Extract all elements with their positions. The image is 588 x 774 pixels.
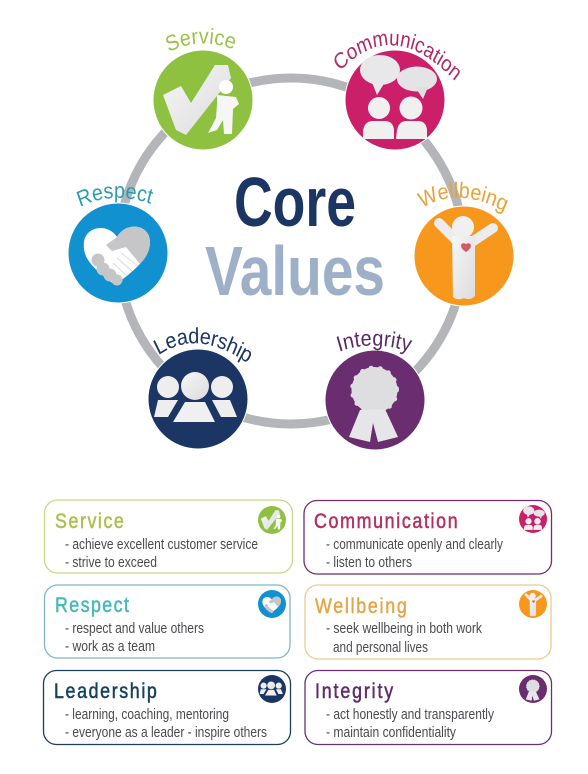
card: Wellbeing: - seek wellbeing in both work xyxy=(326,621,483,637)
badge: Integrity xyxy=(326,331,424,450)
badge: Service: Service xyxy=(166,28,235,50)
badge: Leadership xyxy=(148,327,252,448)
card: Wellbeing xyxy=(305,585,551,659)
card: Integrity xyxy=(305,670,552,744)
card: Service: - achieve excellent customer service xyxy=(65,537,258,553)
card: Service xyxy=(44,500,292,573)
card: Service: - strive to exceed xyxy=(65,555,157,571)
title: Core Values: Values xyxy=(205,232,385,310)
badge: Respect xyxy=(68,186,168,304)
card: Leadership: - learning, coaching, mentoring xyxy=(65,707,229,723)
card: Respect: Respect xyxy=(55,594,129,617)
card: Respect: - respect and value others xyxy=(65,621,204,637)
card: Communication: - listen to others xyxy=(326,555,412,571)
card: Service: Service xyxy=(55,510,124,533)
badge: Communication: Communication xyxy=(334,34,460,80)
ring connecting values xyxy=(118,78,464,424)
card: Wellbeing: Wellbeing xyxy=(315,595,407,618)
card: Integrity: - maintain confidentiality xyxy=(326,725,457,741)
card: Communication: Communication xyxy=(314,510,458,533)
badge: Wellbeing: Wellbeing xyxy=(416,182,508,214)
badge: Respect: Respect xyxy=(76,186,154,206)
badge: Integrity: Integrity xyxy=(336,331,412,354)
card: Communication xyxy=(304,500,552,574)
card: Integrity: - act honestly and transparently xyxy=(326,707,495,723)
card: Respect: - work as a team xyxy=(65,639,155,655)
title: Core Values xyxy=(205,163,385,310)
card: Leadership: Leadership xyxy=(54,680,157,703)
badge: Communication xyxy=(334,34,460,150)
card: Leadership xyxy=(44,670,290,744)
card: Respect xyxy=(44,585,290,658)
card: Leadership: - everyone as a leader - inspire others xyxy=(65,725,267,741)
card: Wellbeing: and personal lives xyxy=(333,640,428,656)
title: Core Values: Core xyxy=(234,163,356,241)
badge: Wellbeing xyxy=(414,182,514,306)
card: Communication: - communicate openly and clearly xyxy=(326,537,504,553)
badge: Service xyxy=(154,28,252,150)
card: Integrity: Integrity xyxy=(315,680,393,703)
badge: Leadership: Leadership xyxy=(153,327,252,363)
